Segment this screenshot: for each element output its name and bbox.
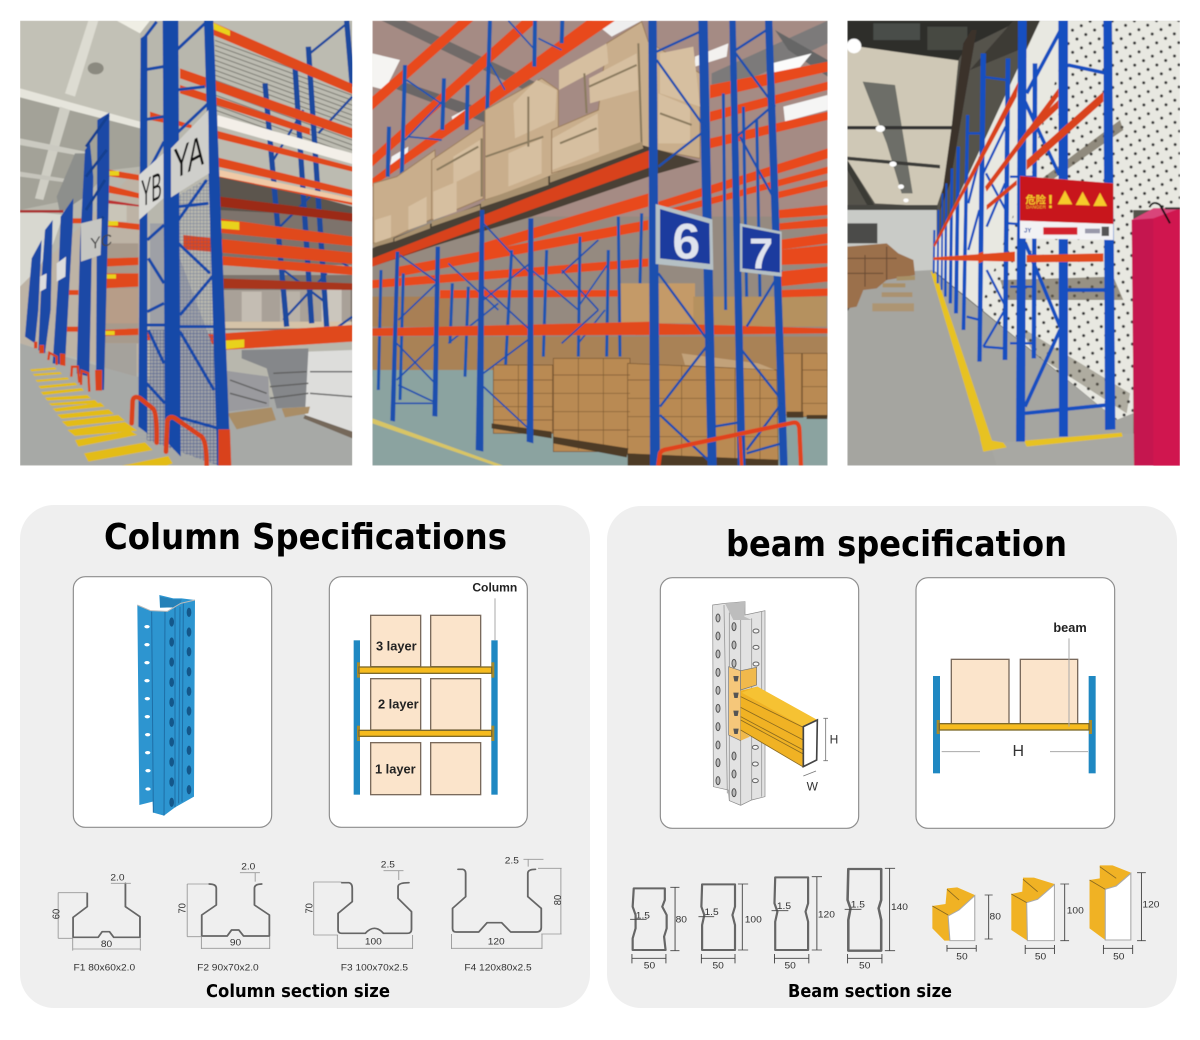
caption: beam section size: Beam section size	[788, 982, 952, 1002]
column section profiles	[51, 856, 564, 973]
panel: column specifications	[20, 505, 590, 1008]
profile F3: 100	[365, 937, 382, 948]
profile 50x140: 50	[859, 961, 871, 972]
card: three-layer rack diagram: Column	[472, 581, 517, 595]
profile 50x100: 100	[745, 915, 762, 925]
profile 50x100: 50	[712, 961, 724, 972]
card: beam connection drawing: W	[807, 780, 819, 794]
boxes	[847, 243, 915, 308]
distant rack frames	[25, 113, 109, 390]
photo: long rack along perforated wall with danger sign: DANGER	[1026, 204, 1047, 209]
main frame	[150, 223, 218, 466]
heading: column specifications: Column Specifications	[104, 517, 507, 558]
pink padded column	[1131, 208, 1154, 466]
floor	[847, 270, 1133, 466]
profile F4: F4 120x80x2.5	[464, 963, 532, 973]
heading: beam specification: beam specification	[726, 524, 1067, 565]
silver pallets	[226, 370, 269, 411]
profile 50x120	[772, 877, 835, 972]
card: column upright drawing	[73, 577, 272, 827]
photo: warehouse aisle with YA and YB racks	[20, 21, 352, 466]
profile F4: 120	[488, 937, 505, 948]
pallets and shelf underside	[372, 145, 700, 260]
profile 50x140: 1.5	[851, 900, 865, 910]
profile 50x100: 1.5	[704, 907, 719, 918]
profile 50x120: 120	[818, 910, 835, 921]
profile F1: 60	[51, 908, 62, 919]
photo: long rack along perforated wall with danger sign	[847, 21, 1180, 467]
right interior	[213, 21, 352, 210]
card: three-layer rack diagram: 1 layer	[375, 761, 416, 776]
yellow floor line	[931, 272, 995, 452]
profile F4	[451, 856, 564, 973]
profile F1: 2.0	[110, 873, 125, 884]
profile 50x120: 50	[785, 961, 796, 972]
profile F4: 80	[553, 894, 564, 905]
card: three-layer rack diagram	[329, 577, 527, 827]
danger sign	[1020, 176, 1113, 240]
yellow beam section 120	[1090, 865, 1160, 963]
caption: column section size: Column section size	[206, 982, 390, 1002]
barriers	[132, 397, 207, 466]
far aisles	[372, 216, 828, 337]
panel: beam specification	[607, 506, 1177, 1008]
yellow beam section 100	[1011, 878, 1084, 963]
profile F2	[177, 862, 270, 973]
profile F1: F1 80x60x2.0	[74, 963, 136, 973]
photo: long rack along perforated wall with danger sign: !	[1047, 191, 1054, 212]
yellow beam section 120: 120	[1142, 900, 1160, 910]
photo: loaded racks with number signs 6 and 7	[372, 21, 828, 466]
profile F4: 2.5	[505, 856, 519, 866]
yellow beam section 100: 50	[1035, 952, 1047, 963]
photo: long rack along perforated wall with danger sign: JY	[1024, 229, 1031, 235]
profile 50x140	[845, 868, 909, 972]
profile F1: 80	[101, 939, 113, 950]
yellow beam section 80	[932, 887, 1002, 963]
photo: long rack along perforated wall with danger sign: 危险	[1025, 193, 1047, 206]
yellow beam section 120: 50	[1113, 952, 1125, 963]
yellow floor stripes	[30, 367, 173, 466]
upper boxes	[373, 22, 700, 243]
profile 50x120: 1.5	[777, 901, 792, 912]
photo: warehouse aisle with YA and YB racks: YC	[90, 231, 113, 253]
rear frames	[265, 21, 352, 327]
profile F3: 2.5	[381, 860, 396, 870]
yellow beam section 80: 50	[956, 952, 968, 963]
blue frames receding	[933, 21, 1115, 442]
orange beams	[933, 82, 1018, 247]
orange far beams	[372, 21, 828, 298]
signs	[171, 110, 209, 197]
profile F3: 70	[304, 903, 316, 914]
profile 50x100	[698, 884, 762, 972]
profile F2: F2 90x70x2.0	[197, 963, 259, 973]
card: beam width diagram	[916, 578, 1115, 828]
card: beam connection drawing: H	[830, 732, 838, 746]
photo: warehouse aisle with YA and YB racks: YB	[141, 163, 162, 216]
photo: loaded racks with number signs 6 and 7: 7	[749, 230, 773, 278]
card: three-layer rack diagram: 3 layer	[376, 639, 417, 654]
yellow beam section 80: 80	[990, 912, 1002, 922]
photo: warehouse aisle with YA and YB racks: YA	[173, 124, 204, 189]
number signs	[656, 204, 713, 270]
yellow beam section 100: 100	[1067, 906, 1084, 916]
profile F1	[51, 873, 140, 973]
perforated wall	[933, 21, 1180, 420]
red guard rail	[658, 423, 801, 466]
far blue uprights	[378, 21, 760, 400]
profile 50x140: 140	[891, 902, 909, 913]
lower boxes	[493, 353, 827, 460]
profile F3	[304, 860, 413, 973]
profile 50x80: 1.5	[636, 911, 651, 922]
profile F2: 2.0	[241, 862, 256, 872]
photo: loaded racks with number signs 6 and 7: 6	[672, 213, 700, 269]
near blue frames	[390, 21, 788, 466]
profile F2: 90	[230, 938, 242, 948]
profile F3: F3 100x70x2.5	[341, 963, 409, 973]
profile 50x80: 50	[644, 961, 656, 972]
card: three-layer rack diagram: 2 layer	[378, 697, 419, 712]
profile 50x80	[630, 887, 688, 972]
orange shelf beam	[372, 150, 652, 267]
profile F2: 70	[177, 903, 189, 914]
profile 50x80: 80	[676, 915, 688, 925]
orange beams	[65, 22, 352, 350]
beam section profiles	[630, 865, 1160, 972]
card: beam width diagram: H	[1013, 743, 1024, 760]
card: beam connection drawing	[660, 578, 859, 828]
card: beam width diagram: beam	[1053, 621, 1087, 635]
